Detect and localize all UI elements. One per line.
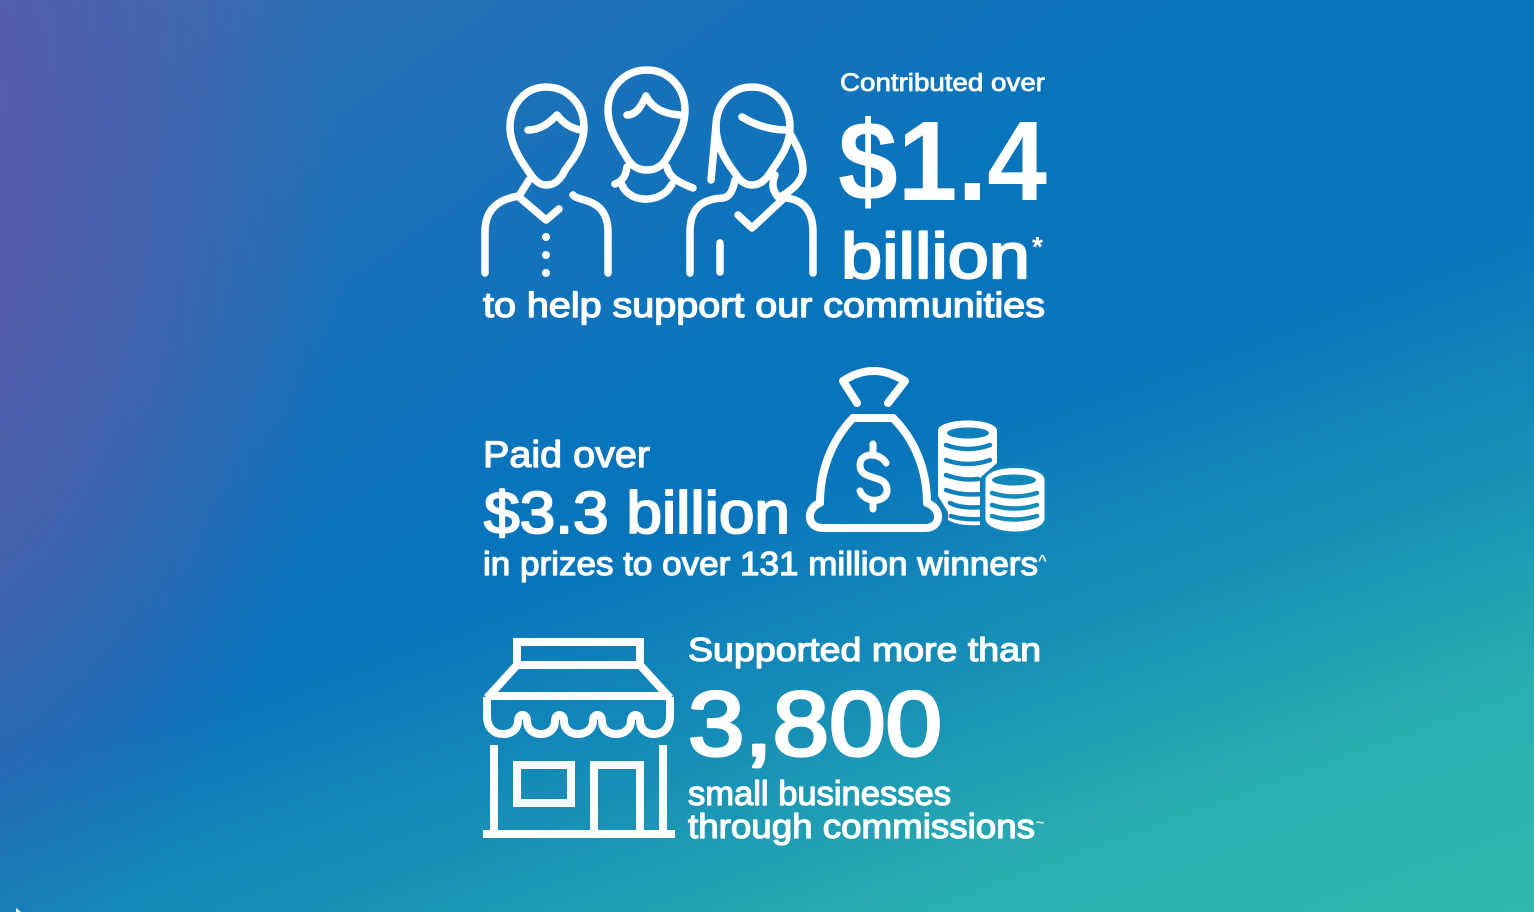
figure: $1.4: $1.4 <box>838 98 1047 224</box>
corner mark <box>16 908 21 912</box>
figure: billion: billion <box>841 220 1030 292</box>
figure: $3.3 billion: $3.3 billion <box>484 480 790 546</box>
bag <box>810 371 938 528</box>
figure: 3,800: 3,800 <box>688 674 942 775</box>
text: through commissions: through commissions <box>688 808 1035 846</box>
section: prizes <box>483 371 1047 582</box>
large coin stack <box>938 420 997 525</box>
icon: money bag and coins <box>810 371 1046 533</box>
text: paid over: Paid over <box>483 434 650 475</box>
small coin stack <box>984 466 1046 533</box>
section: community contribution <box>483 69 1047 325</box>
text: contributed over: Contributed over <box>840 69 1045 97</box>
text: prizes to winners: in prizes to over 131 million winners <box>483 545 1038 582</box>
footnote mark: tilde: ~ <box>1036 814 1044 830</box>
text: to help support our communities: to help support our communities <box>483 286 1045 325</box>
footnote mark: asterisk: * <box>1032 231 1043 262</box>
icon: three people <box>485 70 813 273</box>
footnote mark: caret: ^ <box>1038 552 1047 569</box>
text: small businesses: small businesses <box>688 775 951 813</box>
text: supported more than: Supported more than <box>688 631 1041 668</box>
icon: shop front <box>483 642 675 834</box>
section: small businesses <box>483 631 1044 846</box>
